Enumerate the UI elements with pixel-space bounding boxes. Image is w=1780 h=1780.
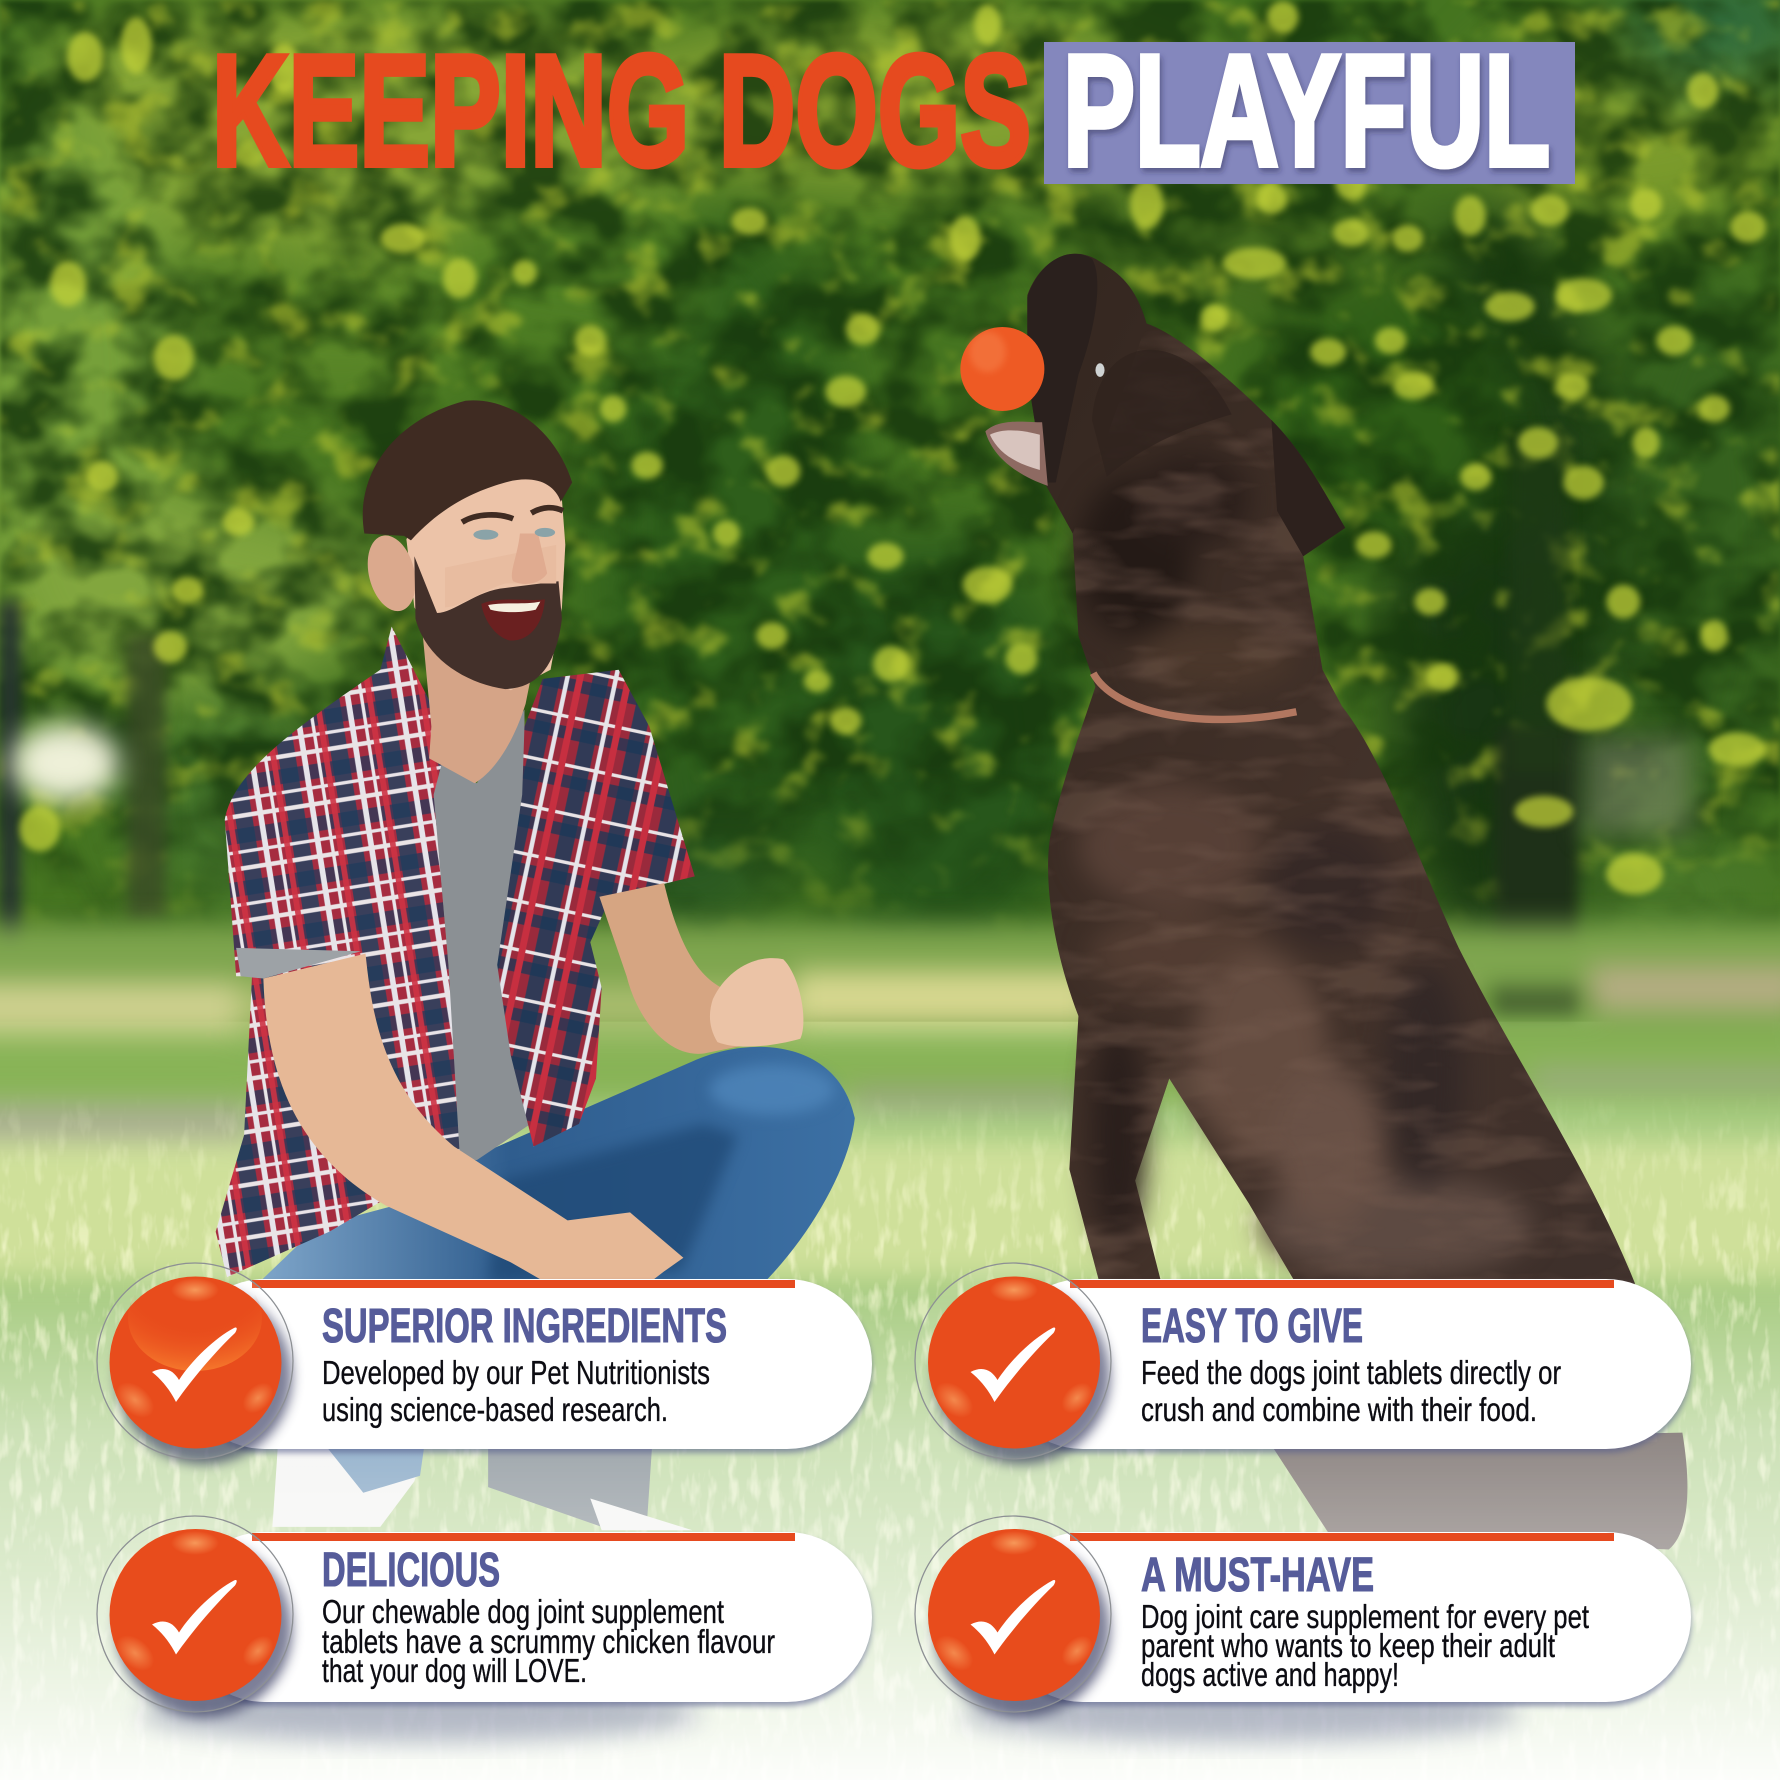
man: lower legs and shoes	[272, 1449, 692, 1530]
title	[212, 23, 1575, 199]
badge	[915, 1263, 1111, 1464]
body text: Feed the dogs joint tablets directly or	[1141, 1354, 1561, 1391]
man: neck	[422, 630, 531, 783]
body text: that your dog will LOVE.	[322, 1652, 587, 1689]
icon: check mark	[152, 1580, 237, 1654]
body text: tablets have a scrummy chicken flavour	[322, 1623, 775, 1660]
body text	[322, 1593, 775, 1689]
lawn and grass	[0, 925, 1780, 1780]
dog: collar	[1093, 673, 1296, 719]
title: KEEPING DOGS: KEEPING DOGS	[212, 23, 1031, 199]
heading: EASY TO GIVE	[1141, 1300, 1363, 1353]
man: nose	[512, 534, 547, 584]
pill shadow	[998, 1536, 1691, 1706]
pill shadow	[180, 1536, 872, 1706]
man: t-shirt	[434, 710, 528, 1160]
man: jeans	[262, 1046, 855, 1279]
body text: Dog joint care supplement for every pet	[1141, 1598, 1589, 1635]
badge	[97, 1516, 293, 1717]
man	[216, 400, 855, 1530]
body text: parent who wants to keep their adult	[1141, 1627, 1555, 1664]
man: eyes and brows	[462, 508, 563, 540]
body text	[1141, 1354, 1561, 1428]
man: jeans shading	[488, 1065, 834, 1283]
panel: delicious	[97, 1516, 872, 1717]
dog: eye	[1095, 363, 1105, 377]
panel: a must-have	[915, 1516, 1691, 1717]
panel: easy to give	[915, 1263, 1691, 1464]
man: fist	[710, 958, 803, 1047]
heading: SUPERIOR INGREDIENTS	[322, 1300, 727, 1353]
man: sleeve cuff	[236, 948, 361, 979]
man: ear	[360, 530, 423, 616]
badge	[97, 1263, 293, 1464]
shadow under lower pills	[140, 1686, 1520, 1742]
man: beard	[414, 556, 562, 689]
body text	[1141, 1598, 1589, 1693]
pill body	[180, 1279, 872, 1449]
man: teeth	[488, 602, 540, 612]
dog: ear flap	[1092, 350, 1232, 477]
icon: check mark	[152, 1327, 237, 1402]
icon: check mark	[970, 1327, 1055, 1402]
accent bar	[252, 1533, 795, 1541]
dog: fur highlights	[1078, 454, 1533, 1277]
man: arm right	[599, 883, 749, 1054]
foliage texture	[0, 0, 1780, 954]
man: cheek	[445, 545, 556, 607]
man: hair	[363, 400, 572, 540]
body text: crush and combine with their food.	[1141, 1391, 1537, 1428]
dog: ear	[1271, 420, 1345, 556]
dog: lower jaw	[985, 422, 1048, 486]
icon: check mark	[970, 1580, 1055, 1654]
bottom white fade	[0, 1283, 1780, 1780]
man: mouth	[481, 599, 545, 641]
man: shirt right	[497, 670, 695, 1147]
foliage background	[0, 0, 1780, 1160]
title: PLAYFUL: PLAYFUL	[1063, 23, 1550, 199]
dog: ball	[960, 327, 1044, 411]
body text: Our chewable dog joint supplement	[322, 1593, 724, 1630]
panel: superior ingredients	[97, 1263, 872, 1464]
bokeh highlights	[19, 1, 1766, 895]
body text	[322, 1354, 710, 1428]
pill shadow	[998, 1283, 1691, 1453]
pill body	[998, 1279, 1691, 1449]
dog: fur texture	[1048, 324, 1657, 1442]
dog	[960, 254, 1687, 1550]
dog: body	[1027, 254, 1657, 1442]
man: shirt left	[216, 627, 460, 1277]
accent bar	[1070, 1280, 1614, 1288]
dog: lower body	[1269, 1433, 1687, 1550]
accent bar	[252, 1280, 795, 1288]
accent bar	[1070, 1533, 1614, 1541]
pill body	[998, 1532, 1691, 1702]
heading: A MUST-HAVE	[1141, 1549, 1374, 1602]
man: arm left and hand	[263, 954, 683, 1288]
heading: DELICIOUS	[322, 1544, 500, 1597]
title: purple box	[1044, 42, 1575, 184]
tree trunks and pole	[0, 431, 1578, 1022]
pill body	[180, 1532, 872, 1702]
dog: head dark	[1027, 254, 1097, 482]
body text: Developed by our Pet Nutritionists	[322, 1354, 710, 1391]
body text: dogs active and happy!	[1141, 1656, 1399, 1693]
man: face	[406, 454, 565, 690]
badge	[915, 1516, 1111, 1717]
pill shadow	[180, 1283, 872, 1453]
body text: using science-based research.	[322, 1391, 668, 1428]
